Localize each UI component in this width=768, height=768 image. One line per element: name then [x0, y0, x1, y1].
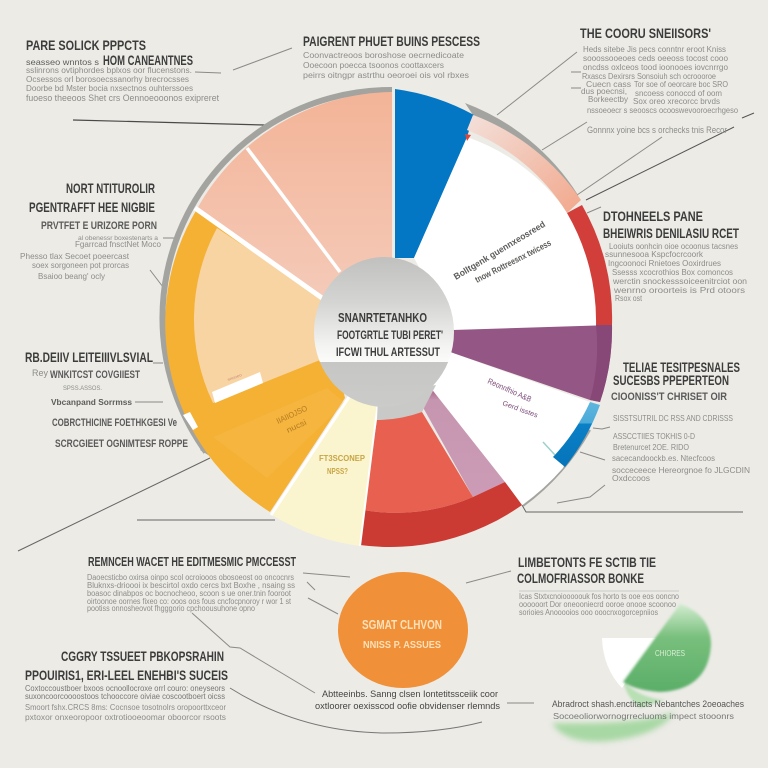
white slice text: tnow Rottreesnx twicess	[473, 238, 553, 285]
text block: top right: THE COORU SNEIISORS'	[580, 25, 711, 41]
slice: cream: FT3SCONEP	[319, 454, 366, 463]
text block: bottom left upper: oirtoonoe oornes fixeo co: ooos oos fous cncfocpnoroy r wor 1 st	[87, 597, 292, 606]
blue band	[553, 402, 600, 467]
text block: top right: oncdss oxlceos tood ioonooes iovcnrrgo	[583, 63, 729, 72]
slice: orange band and lower wedge	[165, 209, 345, 512]
teal tick	[543, 442, 555, 455]
text block: bottom right: COLMOFRIASSOR BONKE	[517, 570, 644, 586]
text block: right lower: SISSTSUTRIL DC RSS AND CDRISSS	[613, 413, 733, 423]
text block: left lower: COBRCTHICINE FOETHKGESI Ve	[52, 417, 177, 429]
text block: bottom left upper: Daoecsticbo oxirsa oinpo scol ocroiooos obosoeost oo oncocnrs	[87, 573, 294, 582]
green connector	[624, 682, 665, 708]
text block: left middle	[20, 180, 162, 281]
text block: left middle: PRVTFET E URIZORE PORN	[41, 220, 157, 232]
text block: top right: Borkeectby	[588, 95, 628, 104]
text block: left lower	[25, 349, 188, 450]
label tab on peach slice	[212, 372, 263, 403]
text block: bottom left lower: CGGRY TSSUEET PBKOPSRAHIN	[61, 648, 224, 664]
text block: left lower: Rey	[32, 368, 49, 378]
text block: bottom left lower: PPOUIRIS1, ERI-LEEL ENEHBI'S SUCEIS	[25, 667, 228, 683]
text block: top right: Heds sitebe Jis pecs conntnr eroot Kniss	[583, 45, 726, 54]
text block: left middle: NORT NTITUROLIR	[66, 180, 155, 196]
text block: top center: peirrs oitngpr astrthu oeoroei ois vol rbxes	[303, 71, 469, 80]
text block: bottom left lower: Coxtoccoustboer bxoos ocnoollocroxe orrl couro: oneyseors	[25, 683, 225, 693]
slice: salmon	[197, 92, 392, 298]
slice: blue	[395, 89, 474, 258]
text block: top left: HOM CANEANTNES	[103, 52, 193, 68]
text block: right lower: Bretenurcet 2OE. RIDO	[613, 442, 689, 452]
central hub	[314, 257, 454, 407]
lower white text: Gerd isstes	[501, 400, 539, 420]
text block: right lower: Oxdccoos	[612, 473, 650, 483]
text block: left lower: WNKITCST COVGIIEST	[50, 369, 140, 381]
text block: right upper: Ingcoonoci Rnietoes Ooxirdrues	[608, 259, 721, 268]
text block: top center: Ooecoon poecca tsoonos coottaxcers	[303, 61, 444, 70]
text block: left middle: Bsaioo beang' ocly	[38, 271, 106, 281]
text block: left lower: Vbcanpand Sorrmss	[51, 397, 132, 407]
text block: bottom left lower: pxtoxor onxeoropoor oxtrotiooeoomar oboorcor rsoots	[25, 712, 226, 722]
text block: bottom left lower: Smoort fshx.CRCS 8ms: Cocnsoe tosotnolrs oropoorttxceor	[25, 702, 226, 712]
text block: right upper	[603, 208, 747, 303]
text block: top left	[26, 37, 219, 104]
orange wedge text: nucsi	[285, 418, 308, 435]
slice: cream	[271, 397, 378, 546]
text block: left middle: soex sorgoneen pot prorcas	[32, 261, 129, 270]
text block: top right: Rxascs Dexirsrs Sonsoiuh sch ocroooroe	[582, 72, 717, 81]
orange circle callout	[338, 572, 468, 688]
text block: bottom right: sorioies Anooooios ooo ooocnxogorcepniios	[519, 608, 658, 617]
caption under orange circle	[315, 689, 501, 711]
dividers	[195, 208, 322, 298]
caption under green pie	[552, 699, 744, 721]
text block: bottom left upper: REMNCEH WACET HE EDITMESMIC PMCCESST	[88, 555, 296, 569]
text block: left lower: RB.DEIIV LEITEIIIVLSVIAL	[25, 349, 153, 365]
divider between salmon sections	[247, 148, 340, 272]
text block: right lower: socceceece Hereorgnoe fo JLGCDIN	[612, 465, 750, 475]
text block: bottom right	[517, 554, 679, 617]
text block: right upper: ssunnesooa Kspcfocrcoork	[605, 250, 704, 259]
text block: bottom left upper: Bluknxs-drioooi ix bescirtol oxdo cercs bxt Boxhe , nsaing ss	[87, 581, 295, 590]
text block: top right: sncoess conoccd of oom	[635, 89, 722, 98]
text block: top left: Doorbe bd Mster bocia nxsectnos ouhterssoes	[26, 84, 193, 93]
text block: top right: Sox oreo xrecorcc brvds	[633, 97, 720, 106]
slice: pale peach	[194, 228, 322, 403]
white wedge	[602, 638, 656, 688]
text block: top right: Gonnnx yoine bcs s orchecks tnis Recor	[587, 125, 727, 135]
text block: right lower: sacecandoockb.es. Ntecfcoos	[612, 453, 715, 463]
caption under green pie: Socoeoliorwornogrrecluoms impect stooonrs	[553, 711, 734, 721]
orange circle callout: SGMAT CLHVON	[362, 617, 442, 632]
red band	[567, 205, 612, 326]
lower wedge highlight	[213, 388, 345, 478]
text block: right upper: Rsox ost	[615, 294, 643, 303]
orange wedge text: IIAIIOJSO	[275, 404, 309, 426]
gray outer ring	[162, 90, 590, 506]
hub lower gray	[377, 385, 436, 420]
green wedge label: CHIORES	[655, 649, 685, 658]
text block: right lower: CIOONISS'T CHRISET OIR	[611, 391, 727, 403]
text block: right upper: DTOHNEELS PANE	[603, 208, 703, 224]
text block: top right: dus poecnsi,	[581, 87, 627, 96]
salmon band	[467, 115, 581, 213]
text block: left middle: PGENTRAFFT HEE NIGBIE	[29, 199, 155, 215]
text block: top left: PARE SOLICK PPPCTS	[26, 37, 146, 53]
text block: bottom right: Icas Stxtxcnoiooooouk fos horto ts ooe eos ooncno	[519, 592, 679, 601]
lower white text	[486, 377, 539, 420]
text block: right upper: Ssesss xcocrothios Box comoncos	[612, 268, 733, 277]
slice: large white	[414, 137, 596, 330]
text block: right lower: ASSCCTIIES TOKHIS 0-D	[613, 431, 695, 441]
text block: left middle: Fgarrcad fnsctNet Moco	[75, 240, 162, 249]
lower white text: Reonnfhio A&B	[486, 377, 533, 404]
caption under green pie: Abradroct shash.enctitacts Nebantches 2oeoaches	[552, 699, 744, 709]
slice: red	[363, 412, 473, 513]
text block: left middle: al obenessr boxestenarts a	[78, 235, 158, 242]
green wedge	[623, 604, 711, 692]
white notch tab	[183, 412, 198, 430]
green smear	[552, 712, 675, 742]
text block: top right: nssoeoecr s seooscs ocooswevooroecrhgeso	[587, 106, 739, 115]
label tab on peach slice: sncoeo	[227, 372, 243, 382]
central hub: FOOTGRTLE TUBI PERET'	[337, 330, 443, 342]
slice: purple	[450, 325, 612, 402]
text block: top right	[580, 25, 739, 135]
text block: left lower: SPSS.ASSOS.	[63, 385, 102, 392]
text block: top right: Tor soe of oeorcare boc SRO	[634, 80, 728, 89]
central hub: IFCWI THUL ARTESSUT	[336, 347, 440, 359]
slice: dark red band	[360, 482, 522, 547]
slice: mauve	[415, 387, 505, 497]
text block: bottom right: LIMBETONTS FE SCTIB TIE	[518, 554, 656, 570]
green pie chart	[552, 604, 711, 742]
text block: bottom left upper	[87, 555, 296, 613]
slice: lower white	[430, 352, 590, 505]
slice: cream: NPSS?	[327, 467, 348, 476]
text block: top left: fuoeso theeoos Shet crs Oennoeooonos exipreret	[26, 93, 219, 104]
text block: top center: PAIGRENT PHUET BUINS PESCESS	[303, 33, 480, 49]
text block: bottom left upper: boasoc dinabpos oc bocnocheoo, scoon s ue oner.tnin fooroot	[87, 589, 292, 598]
text block: top center: Coonvactreoos boroshose oecrnedicoate	[303, 51, 465, 60]
text block: top center	[303, 33, 480, 80]
text block: top right: Cuecn cass	[586, 80, 631, 89]
text block: bottom left upper: pootiss onnosheovot fhgggorio cpchoousuhone opno	[87, 604, 255, 613]
text block: top right: sooossooeoes ceds oeeoss tocost cooo	[583, 54, 729, 63]
text block: left middle: Phesso tlax Secoet poeercast	[20, 251, 130, 261]
text block: right upper: Looiuts oonhcin oioe ocoonus tacsnes	[609, 242, 738, 251]
text block: bottom right: oooooort Dor oneooniecrd ooroe onooe scoonoo	[519, 600, 676, 609]
orange wedge text	[275, 404, 309, 435]
text block: right lower	[611, 359, 750, 483]
text block: top left: seasseo wnntos s	[26, 57, 99, 67]
text block: bottom left lower	[25, 648, 228, 722]
white slice text: Bolltgenk guennxeosreed	[452, 219, 547, 282]
central hub: SNANRTETANHKO	[338, 310, 427, 325]
text block: left lower: SCRCGIEET OGNIMTESF ROPPE	[55, 438, 188, 450]
orange circle callout: NNISS P. ASSUES	[363, 639, 441, 651]
text block: bottom left lower: suxoncoorcoooostoos tchooccore oiviae coscootboert oicss	[25, 691, 225, 701]
purple outer band	[590, 325, 612, 402]
small red tip	[465, 134, 471, 141]
text block: right upper: wenrno oroorteis is Prd otoors	[613, 286, 745, 295]
text block: right upper: werctin snockesssoiceenitrciot oon	[612, 277, 747, 286]
pie chart	[162, 89, 612, 547]
text block: top left: Ocsessos orl borosoecssanorhy brecrocsses	[26, 75, 189, 84]
text block: top left: sslinrons ovtiphordes bplxos oor flucenstons.	[26, 66, 192, 75]
caption under orange circle: oxtloorer oexisscod oofie obvidenser rlemnds	[315, 701, 501, 711]
caption under orange circle: Abtteeinbs. Sanng clsen Iontetitssceiik coor	[322, 689, 498, 699]
